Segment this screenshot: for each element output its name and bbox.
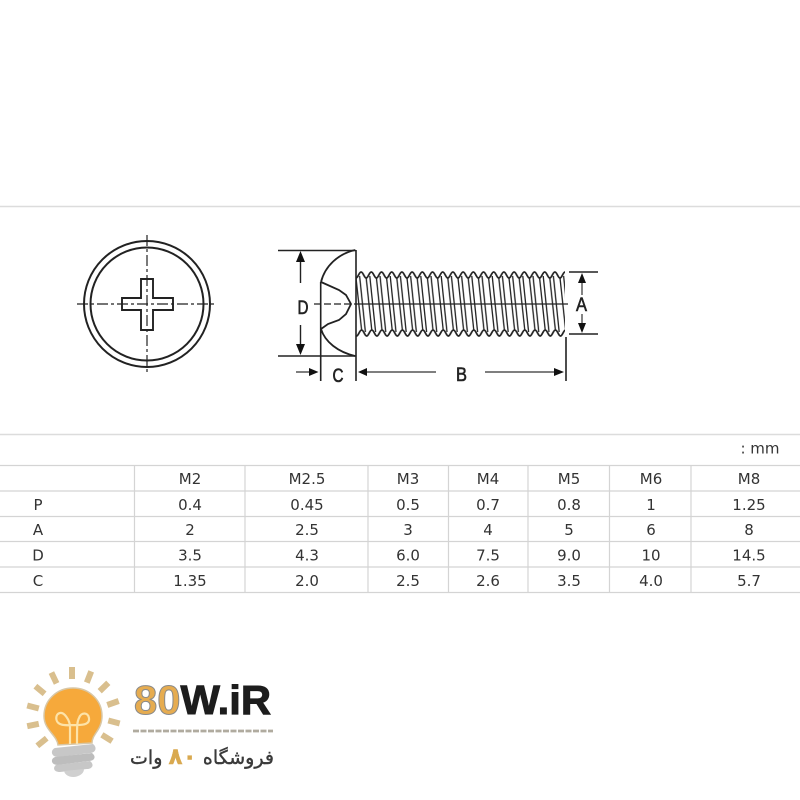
- row P: 1: [646, 496, 656, 514]
- header row: M5: [558, 470, 580, 488]
- row A: 6: [646, 521, 656, 539]
- dimension table: [0, 465, 800, 593]
- row A: 2: [185, 521, 195, 539]
- header row: M3: [397, 470, 419, 488]
- row A: 3: [403, 521, 413, 539]
- row D: 4.3: [295, 546, 319, 564]
- header row: [179, 470, 760, 488]
- logo: [27, 667, 274, 777]
- logo wordmark: 80W.iR: [134, 677, 271, 723]
- row C: 2.6: [476, 572, 500, 590]
- dimension C: [296, 250, 436, 387]
- row P: 1.25: [732, 496, 766, 514]
- dimension B: B: [456, 365, 467, 386]
- screw head: [321, 250, 355, 356]
- row P: [33, 496, 766, 514]
- threaded shaft: [356, 268, 565, 340]
- screw base: [52, 744, 96, 777]
- row C: C: [33, 572, 43, 590]
- row D: 10: [641, 546, 661, 564]
- side view of screw: [314, 250, 565, 356]
- row C: [33, 572, 761, 590]
- dimension D: D: [298, 298, 308, 319]
- row P: 0.8: [557, 496, 581, 514]
- row C: 2.5: [396, 572, 420, 590]
- row C: 3.5: [557, 572, 581, 590]
- row A: A: [33, 521, 44, 539]
- row P: 0.7: [476, 496, 500, 514]
- row P: 0.45: [290, 496, 324, 514]
- unit label: : mm: [740, 440, 780, 458]
- dimension D: [278, 250, 356, 356]
- shaft centre line: [314, 303, 356, 305]
- row D: 3.5: [178, 546, 202, 564]
- header row: M2.5: [289, 470, 325, 488]
- header row: M4: [477, 470, 499, 488]
- header row: M2: [179, 470, 201, 488]
- dimension C: C: [332, 366, 344, 387]
- row D: [32, 546, 766, 564]
- row D: 6.0: [396, 546, 420, 564]
- top view of screw head: [77, 235, 217, 374]
- row A: [33, 521, 754, 539]
- row P: 0.5: [396, 496, 420, 514]
- row C: 1.35: [173, 572, 207, 590]
- bulb glass: [44, 688, 102, 745]
- row A: 2.5: [295, 521, 319, 539]
- row P: P: [33, 496, 43, 514]
- dotted divider: [133, 730, 273, 732]
- row C: 4.0: [639, 572, 663, 590]
- row A: 8: [744, 521, 754, 539]
- header row: M8: [738, 470, 760, 488]
- logo persian tagline: فروشگاه ۸۰ وات: [130, 744, 274, 770]
- row A: 4: [483, 521, 493, 539]
- row A: 5: [564, 521, 574, 539]
- row D: D: [32, 546, 44, 564]
- row C: 5.7: [737, 572, 761, 590]
- row C: 2.0: [295, 572, 319, 590]
- shaft axis: [356, 303, 568, 305]
- row D: 7.5: [476, 546, 500, 564]
- dimension A: A: [576, 295, 587, 316]
- bulb rays: [27, 667, 120, 746]
- row D: 9.0: [557, 546, 581, 564]
- icon: light bulb: [27, 667, 120, 777]
- dimension B: [456, 337, 566, 386]
- header row: M6: [640, 470, 662, 488]
- dimension A: [569, 272, 598, 334]
- row P: 0.4: [178, 496, 202, 514]
- filament: [56, 713, 89, 744]
- row D: 14.5: [732, 546, 766, 564]
